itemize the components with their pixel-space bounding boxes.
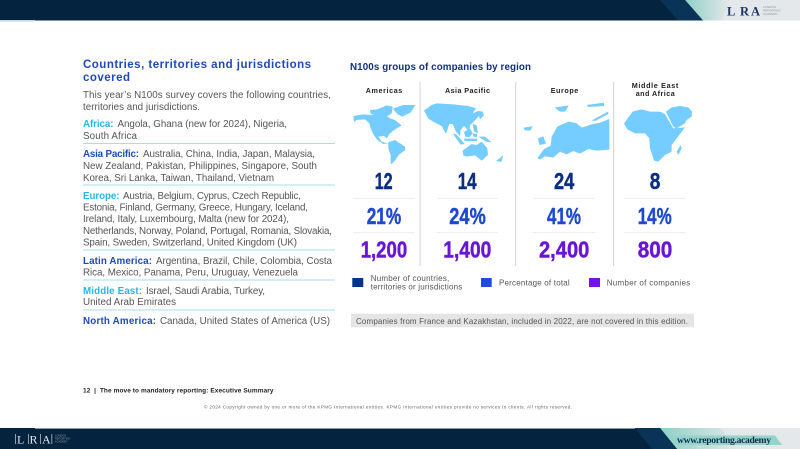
legend: Number of companies	[607, 278, 690, 288]
number of countries: Middle East and Africa: 8	[650, 168, 660, 194]
percentage: Europe: 41%	[547, 203, 581, 229]
region: Africa	[83, 119, 287, 142]
logo: LRA footer	[15, 432, 70, 446]
region: Europe: Estonia, Finland, Germany, Greece, Hungary, Iceland,	[83, 202, 308, 214]
region: Latin America	[83, 256, 333, 278]
logo: LRA footer: ACADEMY	[55, 440, 68, 444]
logo: LRA header	[727, 4, 781, 18]
companies: Americas: 1,200	[361, 236, 407, 262]
column: Asia Pacific	[424, 86, 503, 262]
logo: LRA footer: R	[30, 432, 38, 446]
icon: map of Europe	[523, 103, 609, 160]
heading: countries covered: covered	[83, 72, 130, 84]
region: Latin America: Argentina, Brazil, Chile, Colombia, Costa	[156, 256, 333, 267]
page footer label: 12 | The move to mandatory reporting: Executive Summary	[83, 388, 274, 394]
region: Europe: Netherlands, Norway, Poland, Portugal, Romania, Slovakia,	[83, 226, 332, 237]
region: Europe: Austria, Belgium, Cyprus, Czech Republic,	[123, 191, 301, 202]
column: Middle East and Africa	[624, 81, 692, 262]
region: Africa: Africa:	[83, 119, 114, 130]
number of countries: Europe: 24	[554, 168, 574, 194]
region: Africa: Angola, Ghana (new for 2024), Nigeria,	[118, 119, 287, 130]
legend	[352, 274, 690, 292]
callout: note on France and Kazakhstan: Companies from France and Kazakhstan, included in 2022, are not covered in this edition.	[356, 317, 688, 326]
region: Asia Pacific: New Zealand, Pakistan, Philippines, Singapore, South	[83, 161, 317, 172]
intro text	[83, 90, 331, 113]
logo: LRA footer: L	[17, 432, 24, 446]
region: Europe: Europe:	[83, 191, 120, 202]
chart heading: N100s groups of companies by region	[350, 62, 531, 73]
region: Europe: Spain, Sweden, Switzerland, United Kingdom (UK)	[83, 238, 297, 248]
logo: LRA header: LONDON	[763, 5, 776, 9]
heading: countries covered: Countries, territories and jurisdictions	[83, 59, 311, 71]
column: Europe	[523, 86, 609, 262]
percentage: Asia Pacific: 24%	[449, 203, 486, 229]
logo: LRA header: LRA	[727, 4, 760, 18]
region: North America	[83, 316, 330, 327]
callout: note on France and Kazakhstan	[351, 314, 694, 327]
region: North America: North America:	[83, 316, 156, 327]
column: Asia Pacific: Asia Pacific	[445, 86, 490, 95]
legend: Percentage of total	[499, 278, 570, 288]
legend: Number of countries,	[371, 274, 449, 283]
percentage: Americas: 21%	[367, 203, 401, 229]
logo: LRA header: ACADEMY	[763, 12, 778, 16]
column: Middle East and Africa: and Africa	[636, 89, 676, 98]
region: Latin America: Rica, Mexico, Panama, Peru, Uruguay, Venezuela	[83, 268, 299, 278]
panel: N100s groups of companies by region	[350, 62, 694, 327]
region: North America: Canada, United States of America (US)	[160, 316, 330, 327]
panel: countries, territories and jurisdictions covered	[83, 59, 335, 327]
region: Asia Pacific: Korea, Sri Lanka, Taiwan, Thailand, Vietnam	[83, 173, 274, 184]
icon: map of the Americas	[353, 105, 415, 164]
column: Europe: Europe	[551, 86, 578, 95]
region: Middle East: Israel, Saudi Arabia, Turkey,	[146, 286, 265, 297]
percentage: Middle East and Africa: 14%	[638, 203, 672, 229]
number of countries: Asia Pacific: 14	[458, 168, 477, 194]
footer band	[0, 428, 800, 449]
region: Africa: South Africa	[83, 131, 138, 142]
logo: LRA header: REPORTING	[763, 8, 781, 12]
companies: Middle East and Africa: 800	[638, 236, 672, 262]
companies: Europe: 2,400	[539, 236, 589, 262]
header band	[0, 0, 800, 22]
logo: LRA footer: A	[42, 432, 51, 446]
logo: LRA footer: LONDON	[55, 434, 66, 438]
copyright line: © 2024 Copyright owned by one or more of the KPMG International entities. KPMG International entities provide no services to clients. All rights reserved.	[204, 404, 572, 410]
column: Middle East and Africa: Middle East	[632, 81, 679, 90]
region: Latin America: Latin America:	[83, 256, 152, 267]
icon: map of Middle East and Africa	[624, 106, 692, 162]
region: Middle East: Middle East:	[83, 286, 142, 297]
region: Middle East: United Arab Emirates	[83, 297, 176, 308]
number of countries: Americas: 12	[375, 168, 393, 194]
logo: LRA footer: REPORTING	[55, 436, 70, 440]
intro text: territories and jurisdictions.	[83, 102, 200, 113]
region: Asia Pacific: Asia Pacific:	[83, 149, 139, 160]
column: Americas: Americas	[366, 86, 402, 95]
legend: territories or jurisdictions	[371, 282, 462, 292]
region: Middle East	[83, 286, 265, 308]
region: Asia Pacific	[83, 149, 317, 184]
region: Asia Pacific: Australia, China, India, Japan, Malaysia,	[143, 149, 315, 160]
banner: website address: www.reporting.academy	[677, 435, 771, 446]
icon: map of Asia Pacific	[424, 103, 503, 162]
column: Americas	[353, 86, 415, 262]
region: Europe: Ireland, Italy, Luxembourg, Malta (new for 2024),	[83, 214, 289, 225]
intro text: This year’s N100s survey covers the following countries,	[83, 90, 331, 101]
heading: countries covered	[83, 59, 311, 84]
companies: Asia Pacific: 1,400	[443, 236, 491, 262]
region: Europe	[83, 191, 332, 248]
